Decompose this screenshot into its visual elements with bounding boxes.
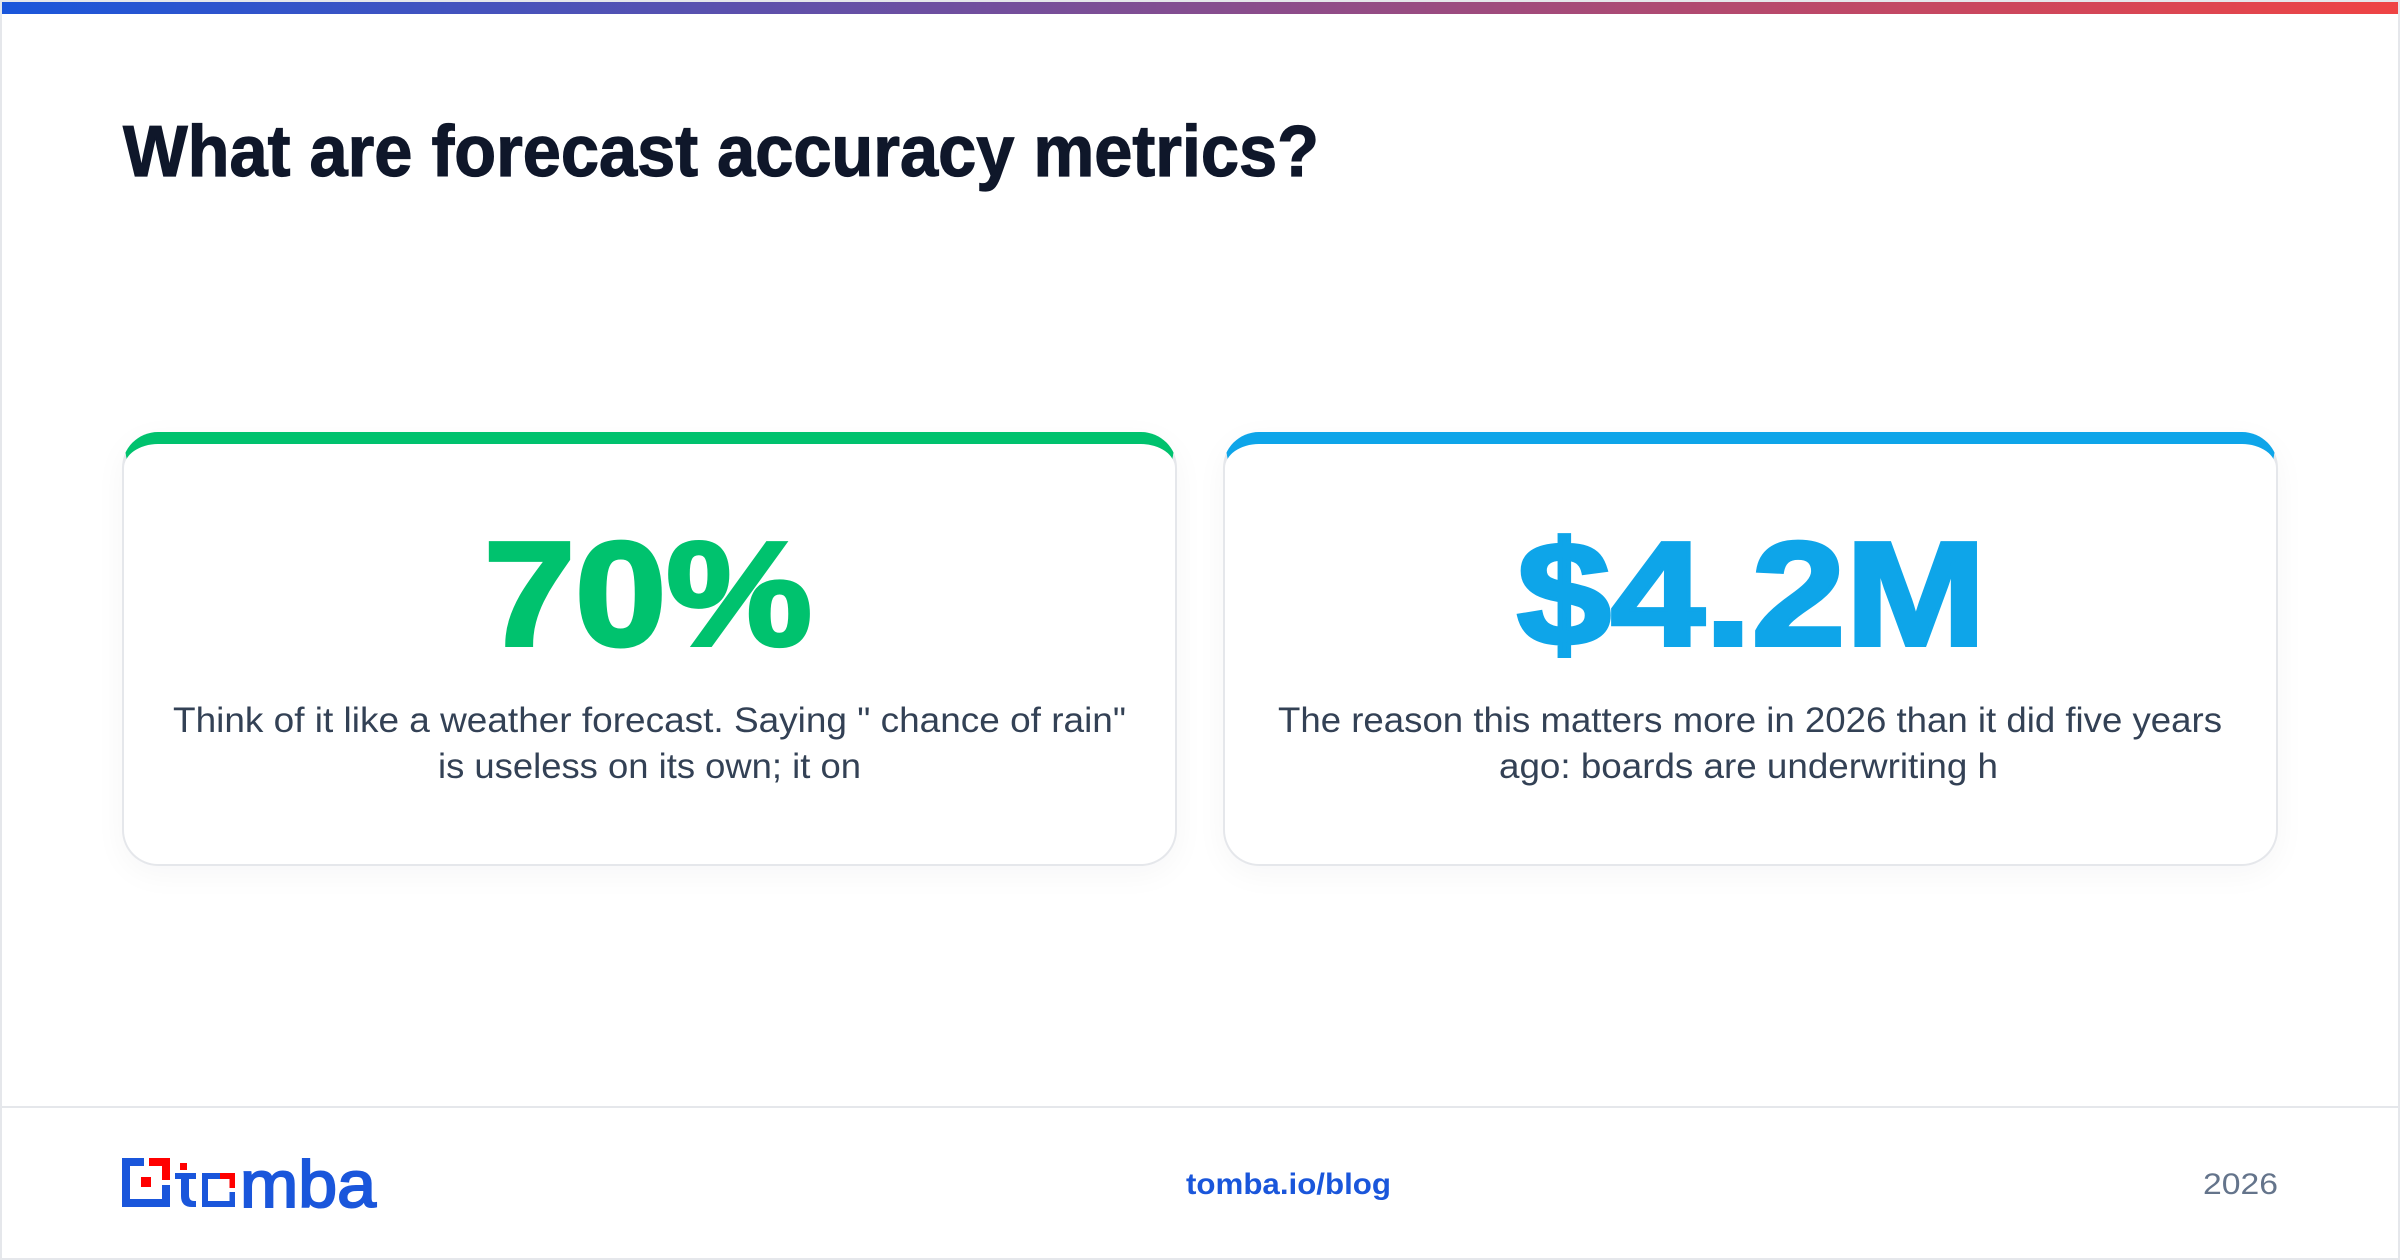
description: blue card: ago: boards are underwriting h	[1499, 747, 1998, 786]
icon: logo letter o	[202, 1173, 235, 1207]
stat: 70%: 70%	[484, 512, 812, 677]
description: green card: is useless on its own; it on	[438, 747, 861, 786]
icon: logo letter t	[175, 1163, 196, 1207]
description: green card	[173, 701, 1126, 786]
stat: $4.2M: $4.2M	[1517, 512, 1986, 677]
logo: tomba	[122, 1147, 376, 1221]
title: What are forecast accuracy metrics?	[123, 112, 1319, 192]
logo wordmark: mba	[240, 1147, 376, 1221]
description: blue card: The reason this matters more in 2026 than it did five years	[1278, 701, 2222, 740]
top gradient bar	[2, 2, 2398, 14]
footer link: tomba.io/blog	[1186, 1168, 1391, 1201]
footer year: 2026	[2203, 1168, 2278, 1201]
footer divider	[2, 1106, 2398, 1108]
description: blue card	[1278, 701, 2222, 786]
icon: logo square	[122, 1158, 170, 1207]
description: green card: Think of it like a weather forecast. Saying " chance of rain"	[173, 701, 1126, 740]
panel: green card	[122, 432, 1177, 866]
panel: blue card	[1223, 432, 2278, 866]
